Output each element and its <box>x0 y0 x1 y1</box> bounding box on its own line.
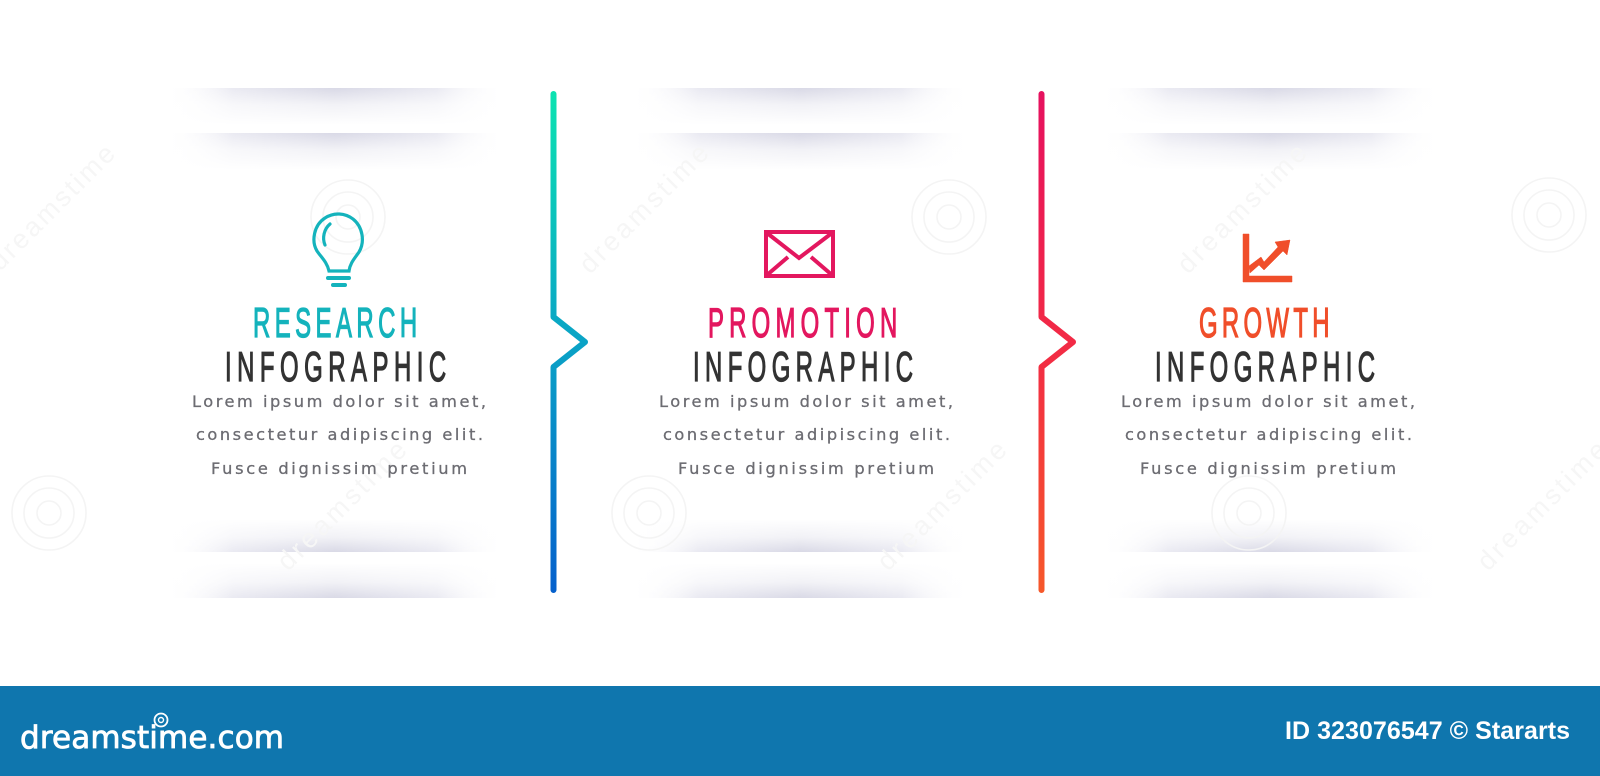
heading: infographic: INFOGRAPHIC <box>693 344 913 391</box>
body text <box>192 392 486 478</box>
body text: Fusce dignissim pretium <box>678 459 934 478</box>
body text: consectetur adipiscing elit. <box>196 425 483 444</box>
footer banner <box>0 686 1600 776</box>
divider arrow: teal to blue <box>554 94 585 590</box>
background watermarks: dreamstime <box>1171 138 1312 279</box>
panel: promotion <box>659 232 953 478</box>
body text: Fusce dignissim pretium <box>1140 459 1396 478</box>
background watermarks <box>0 138 1600 576</box>
body text: consectetur adipiscing elit. <box>1125 425 1412 444</box>
logo: dreamstime: dreamstime.com <box>20 720 284 756</box>
icon: envelope <box>766 232 833 276</box>
heading: research: RESEARCH <box>253 300 417 347</box>
background watermarks: dreamstime <box>271 435 412 576</box>
icon: light bulb <box>314 214 362 285</box>
body text <box>1121 392 1415 478</box>
body text: consectetur adipiscing elit. <box>663 425 950 444</box>
divider arrow: pink to orange <box>1042 94 1073 590</box>
body text: Lorem ipsum dolor sit amet, <box>659 392 953 411</box>
panel: research <box>192 214 486 478</box>
body text: Lorem ipsum dolor sit amet, <box>1121 392 1415 411</box>
body text <box>659 392 953 478</box>
body text: Lorem ipsum dolor sit amet, <box>192 392 486 411</box>
heading: infographic: INFOGRAPHIC <box>1155 344 1375 391</box>
shadow bands: bottom <box>160 519 1450 598</box>
background watermarks: dreamstime <box>871 435 1012 576</box>
background watermarks: dreamstime <box>573 138 714 279</box>
heading: infographic: INFOGRAPHIC <box>225 344 446 391</box>
heading: growth: GROWTH <box>1199 300 1330 347</box>
shadow bands: top <box>160 88 1450 170</box>
icon: growth chart <box>1243 234 1292 282</box>
panel: growth <box>1121 234 1415 478</box>
body text: Fusce dignissim pretium <box>211 459 467 478</box>
heading: promotion: PROMOTION <box>708 300 897 347</box>
image id and author: ID 323076547 © Stararts <box>1285 717 1570 745</box>
